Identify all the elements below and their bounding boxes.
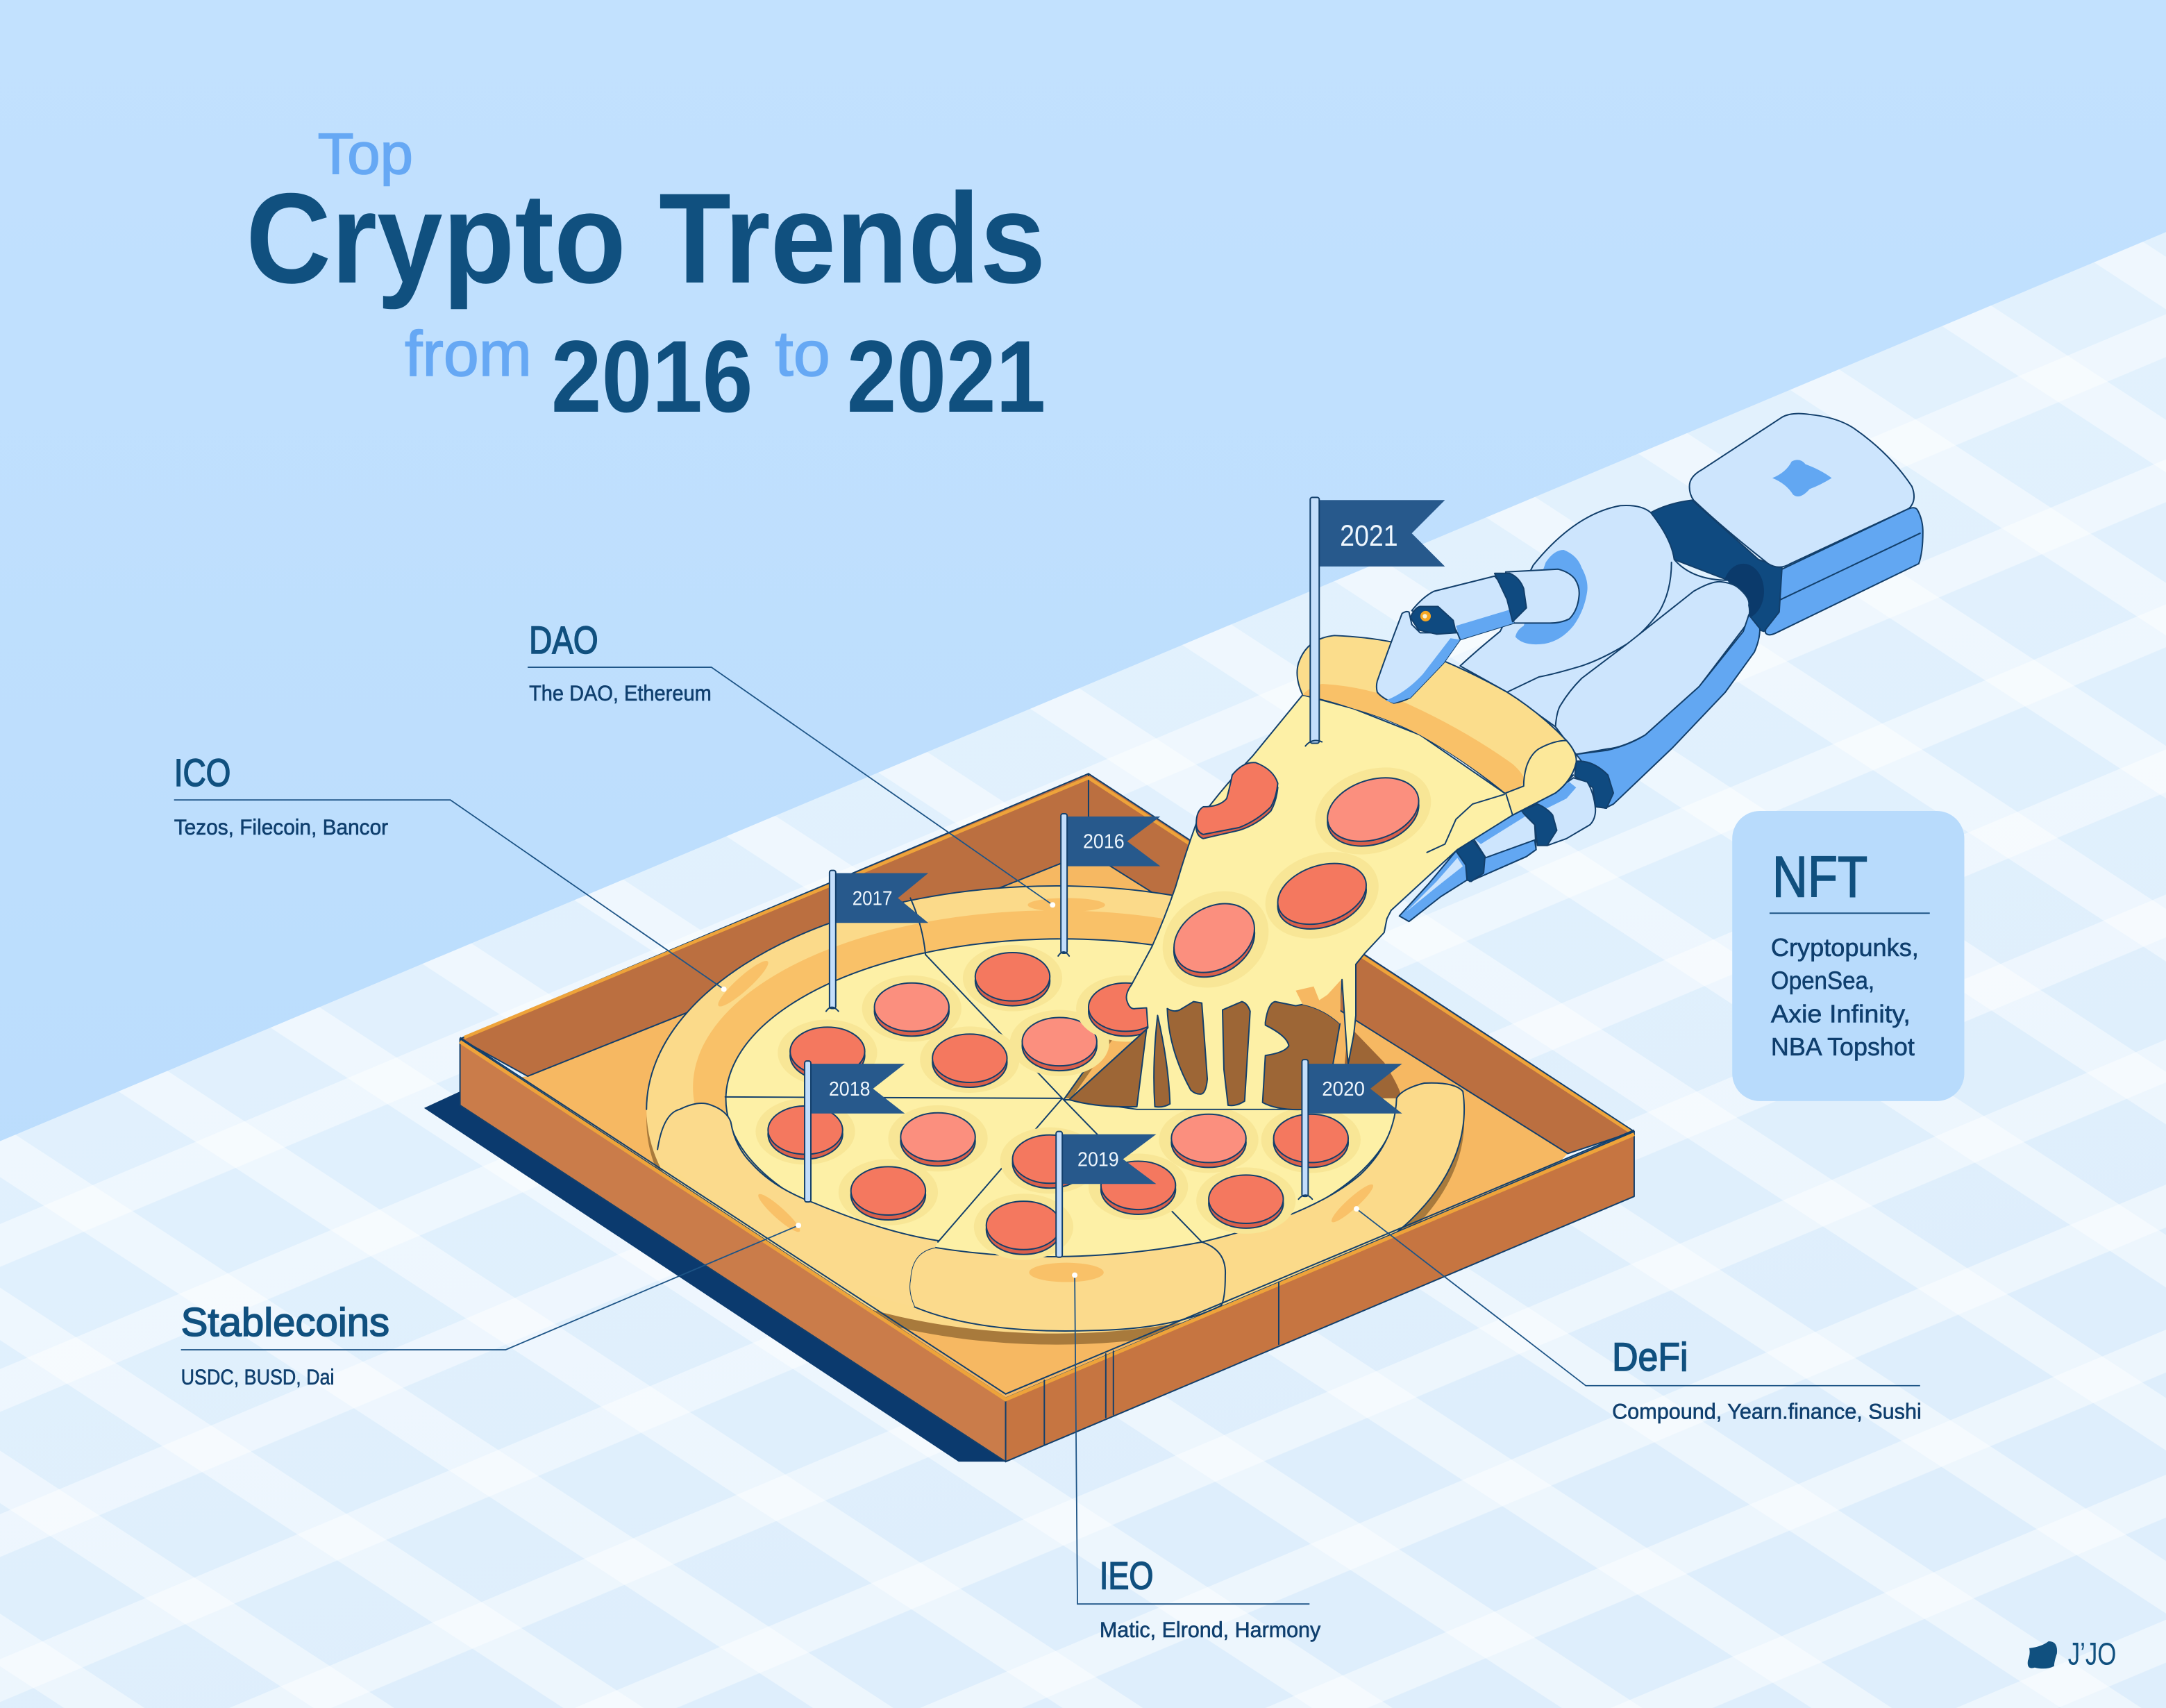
flag 2020 xyxy=(1298,1060,1402,1199)
knuckle eye xyxy=(1420,611,1431,621)
flag 2019 xyxy=(1056,1132,1156,1257)
title: Top xyxy=(318,121,413,186)
slice crust xyxy=(1297,635,1577,793)
flag 2018 xyxy=(805,1061,905,1202)
blue disc xyxy=(1516,550,1588,644)
flag 2016: 2016 xyxy=(1083,831,1125,853)
thumb tube xyxy=(1506,569,1579,623)
panel: NFT: NFT xyxy=(1772,844,1867,909)
flag 2018: 2018 xyxy=(829,1078,871,1100)
pizza xyxy=(646,886,1464,1345)
panel: NFT xyxy=(1732,811,1964,1101)
pizza box interior xyxy=(460,773,1634,1404)
tip blue underside xyxy=(1386,638,1460,703)
title: from xyxy=(405,319,532,390)
cheese holes xyxy=(1069,980,1341,1110)
crust end lobe xyxy=(1506,741,1577,815)
callout: IEO xyxy=(1072,1273,1320,1642)
callout: IEO: Matic, Elrond, Harmony xyxy=(1100,1617,1320,1642)
title: to xyxy=(775,319,830,390)
callout: DAO xyxy=(528,619,1055,907)
cheese xyxy=(726,939,1397,1259)
thumb tip xyxy=(1377,612,1460,703)
thumb mound xyxy=(1507,562,1672,692)
callout: ICO xyxy=(174,751,727,992)
flag 2021: 2021 xyxy=(1340,519,1398,553)
title: Crypto Trends xyxy=(246,167,1046,310)
callout: Stablecoins xyxy=(181,1223,801,1389)
callout: Stablecoins: USDC, BUSD, Dai xyxy=(181,1364,335,1389)
wrist joint xyxy=(1575,761,1613,808)
cuff side xyxy=(1765,508,1923,635)
cheese droop fold xyxy=(1427,794,1504,853)
wrist ring xyxy=(1722,564,1764,619)
left crust outline xyxy=(657,1103,938,1241)
orange inner band xyxy=(693,910,1181,1126)
slice cheese xyxy=(1069,695,1573,1110)
flag 2016 xyxy=(1058,814,1160,956)
title: 2016 xyxy=(551,320,753,434)
seam top left xyxy=(910,898,925,955)
lower pad xyxy=(1556,582,1749,754)
callout: DAO: The DAO, Ethereum xyxy=(529,680,712,705)
wrist dark xyxy=(1651,500,1782,631)
flag 2020: 2020 xyxy=(1322,1078,1365,1100)
callout: Stablecoins: Stablecoins xyxy=(181,1300,389,1345)
thumb dark ring xyxy=(1495,573,1527,621)
front crust piece xyxy=(909,1242,1225,1331)
flag 2017 xyxy=(826,871,928,1012)
knuckle xyxy=(1411,607,1456,634)
panel: NFT: Cryptopunks, xyxy=(1771,934,1919,962)
title xyxy=(246,121,1046,434)
panel: NFT: Axie Infinity, xyxy=(1771,1000,1911,1028)
crust orange band xyxy=(1302,684,1524,793)
flag 2019: 2019 xyxy=(1077,1148,1119,1171)
robot thumb over crust xyxy=(1377,573,1527,703)
pizza underside shadow xyxy=(646,897,1464,1345)
left crust piece xyxy=(657,1103,938,1307)
crust outline xyxy=(646,886,1202,1110)
box shadow xyxy=(424,1091,1006,1462)
cuff top xyxy=(1690,414,1914,567)
thumb underside xyxy=(1456,610,1514,639)
lifted pizza slice xyxy=(1069,635,1595,1110)
right crust piece xyxy=(1202,1083,1464,1314)
robot hand back xyxy=(1460,414,1923,808)
crust xyxy=(646,886,1464,1334)
palm base xyxy=(1460,505,1749,754)
callout: ICO: Tezos, Filecoin, Bancor xyxy=(174,814,388,839)
callout: ICO: ICO xyxy=(174,751,230,794)
rim highlight xyxy=(460,1041,1634,1400)
logo xyxy=(2028,1636,2116,1672)
slice pepperoni xyxy=(1145,753,1443,1007)
pepperoni on pizza xyxy=(755,945,1361,1260)
flag 2021 xyxy=(1305,497,1445,746)
panel: NFT: OpenSea, xyxy=(1771,967,1874,995)
callout: DeFi: Compound, Yearn.finance, Sushi xyxy=(1612,1399,1922,1424)
thumb middle segment xyxy=(1412,576,1514,639)
callout: DeFi xyxy=(1354,1206,1922,1424)
panel: NFT: NBA Topshot xyxy=(1771,1033,1915,1061)
callout: DeFi: DeFi xyxy=(1612,1335,1688,1380)
cuff mark xyxy=(1772,460,1831,496)
callout: DAO: DAO xyxy=(529,619,598,662)
slice cut lines xyxy=(725,955,1202,1242)
flag 2017: 2017 xyxy=(853,887,892,910)
lower fingers xyxy=(1400,778,1595,921)
near box walls xyxy=(460,1037,1634,1462)
blue sole xyxy=(1576,614,1760,808)
title: 2021 xyxy=(847,320,1046,434)
shadow on box floor xyxy=(1340,1025,1401,1116)
callout: IEO: IEO xyxy=(1100,1554,1153,1597)
wall seams xyxy=(1044,1282,1279,1445)
crust highlights xyxy=(714,898,1377,1282)
logo: J’JO xyxy=(2068,1636,2116,1672)
